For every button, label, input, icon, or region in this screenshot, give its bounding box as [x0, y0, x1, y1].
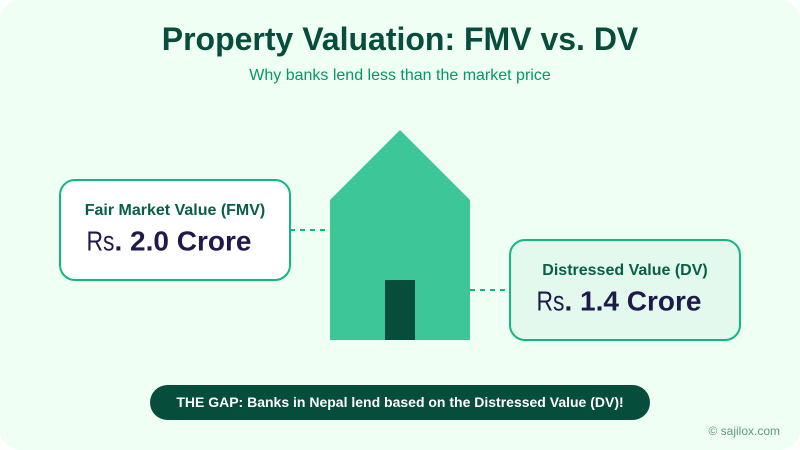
connector: FMV to house: [290, 229, 330, 231]
panel: fair market value: . 2.0 Crore: [114, 226, 251, 256]
panel: distressed value: . 1.4 Crore: [564, 286, 701, 316]
panel: distressed value: Rs: [536, 286, 564, 316]
panel: distressed value: Distressed Value (DV): [542, 262, 708, 279]
connector: DV to house: [470, 289, 510, 291]
title: Property Valuation: FMV vs. DV: [162, 21, 639, 57]
icon: house: [330, 130, 470, 340]
footer credit: © sajilox.com: [708, 424, 780, 438]
subtitle: Why banks lend less than the market price: [249, 67, 551, 84]
panel: fair market value: Fair Market Value (FMV): [85, 202, 265, 219]
panel: fair market value: Rs: [86, 226, 114, 256]
panel: distressed value: [510, 240, 740, 340]
panel: fair market value: [60, 180, 290, 280]
callout: the gap: [150, 385, 650, 420]
callout: the gap: THE GAP: Banks in Nepal lend based on the Distressed Value (DV)!: [176, 394, 624, 410]
